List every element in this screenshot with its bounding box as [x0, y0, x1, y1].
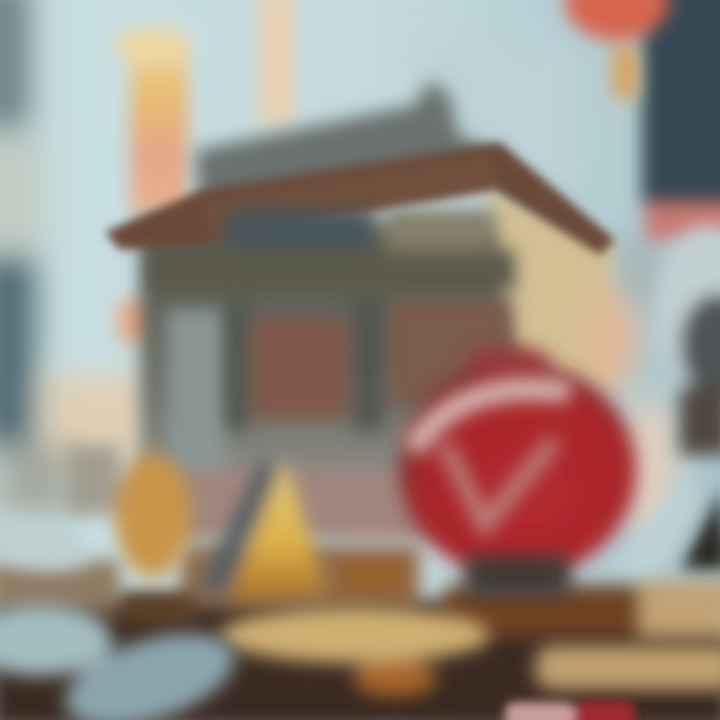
temple: frieze: [150, 210, 515, 290]
lantern: red top right: [565, 0, 669, 98]
tower: left golden tower: [115, 27, 191, 342]
object: red and white item bottom: [505, 700, 635, 720]
object: golden pyramid: [198, 458, 328, 600]
tower: pale distant tower: [258, 0, 294, 125]
light haze: right of temple: [586, 290, 680, 545]
temple: body: [140, 185, 615, 540]
building: dark skyscraper top right: [642, 0, 720, 240]
object: golden dome: [65, 445, 195, 624]
sphere: stand: [465, 555, 570, 597]
background: distant city: [0, 0, 665, 515]
temple: main roof: [105, 142, 615, 255]
temple: upper roof: [195, 80, 505, 210]
object: wooden slab right: [535, 645, 720, 690]
object: pale blue dishes left: [0, 511, 246, 720]
sphere: red ornament: [400, 346, 636, 597]
foreground: tabletop: [0, 545, 720, 720]
object: wooden slab centre: [220, 607, 490, 696]
temple: wooden doors: [226, 295, 510, 430]
figure: helmet at right edge: [610, 225, 720, 585]
